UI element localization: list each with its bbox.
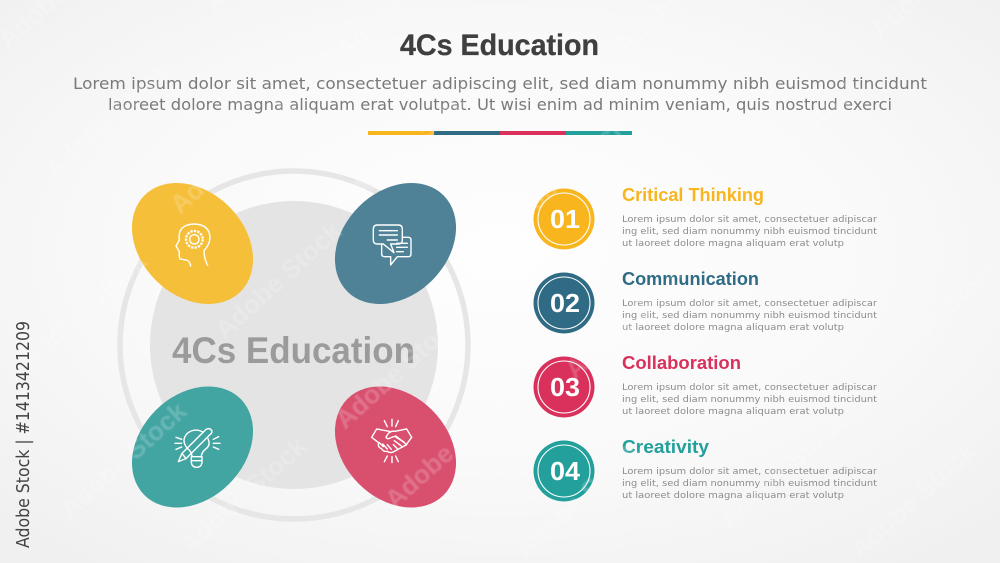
watermark pattern: Adobe Stock bbox=[714, 405, 853, 534]
badge 04 bbox=[534, 440, 594, 502]
title: 4Cs Education bbox=[400, 29, 599, 62]
watermark pattern: Adobe Stock bbox=[379, 385, 518, 514]
description: Lorem ipsum dolor sit amet, consectetuer adipiscar bbox=[622, 466, 877, 477]
description: ing elit, sed diam nonummy nibh euismod tincidunt bbox=[622, 478, 877, 489]
intro text bbox=[73, 74, 927, 114]
description: Lorem ipsum dolor sit amet, consectetuer adipiscar bbox=[622, 298, 877, 309]
icon: speech bubbles bbox=[373, 225, 411, 265]
outer ring bbox=[120, 171, 468, 519]
heading: Creativity bbox=[622, 436, 710, 457]
description: Lorem ipsum dolor sit amet, consectetuer adipiscar bbox=[622, 382, 877, 393]
petal: communication bbox=[311, 159, 480, 328]
panel: item 01 critical thinking bbox=[534, 184, 877, 250]
centre label: 4Cs Education bbox=[172, 330, 415, 371]
heading: Collaboration bbox=[622, 352, 741, 373]
watermark pattern: Adobe Stock bbox=[209, 215, 348, 344]
petal: creativity bbox=[108, 362, 277, 532]
badge 02 bbox=[534, 272, 594, 334]
watermark pattern: Adobe Stock bbox=[729, 70, 868, 199]
icon: handshake bbox=[372, 419, 412, 463]
stock id label: Adobe Stock | #1413421209 bbox=[14, 321, 34, 548]
watermark pattern: Adobe Stock bbox=[559, 255, 698, 384]
badge 04: 04 bbox=[550, 456, 581, 486]
watermark pattern: Adobe Stock bbox=[54, 395, 193, 524]
icon: bulb and pencil bbox=[175, 429, 220, 467]
description: ut laoreet dolore magna aliquam erat volutp bbox=[622, 322, 844, 333]
watermark pattern: Adobe Stock bbox=[164, 90, 303, 219]
panel: item 02 communication bbox=[534, 268, 877, 334]
heading: Critical Thinking bbox=[622, 184, 764, 205]
description bbox=[622, 382, 877, 417]
heading: Communication bbox=[622, 268, 759, 289]
description bbox=[622, 466, 877, 501]
watermark pattern: Adobe Stock bbox=[329, 305, 468, 434]
watermark pattern: Adobe Stock bbox=[844, 435, 983, 563]
description bbox=[622, 298, 877, 333]
intro text: laoreet dolore magna aliquam erat volutpat. Ut wisi enim ad minim veniam, quis nostrud exerci bbox=[108, 95, 892, 114]
description: ing elit, sed diam nonummy nibh euismod tincidunt bbox=[622, 226, 877, 237]
badge 03: 03 bbox=[550, 372, 580, 402]
description: ut laoreet dolore magna aliquam erat volutp bbox=[622, 406, 844, 417]
description: ing elit, sed diam nonummy nibh euismod tincidunt bbox=[622, 310, 877, 321]
intro text: Lorem ipsum dolor sit amet, consectetuer adipiscing elit, sed diam nonummy nibh euismod tincidunt bbox=[73, 74, 927, 93]
watermark pattern: Adobe Stock bbox=[174, 430, 313, 559]
colour divider bbox=[368, 131, 632, 135]
petal: collaboration bbox=[311, 362, 480, 532]
watermark pattern: Adobe Stock bbox=[39, 55, 178, 184]
watermark pattern: Adobe Stock bbox=[344, 75, 483, 204]
description bbox=[622, 214, 877, 249]
description: ut laoreet dolore magna aliquam erat volutp bbox=[622, 490, 844, 501]
icon: head with gear bbox=[176, 224, 210, 266]
description: Lorem ipsum dolor sit amet, consectetuer adipiscar bbox=[622, 214, 877, 225]
description: ut laoreet dolore magna aliquam erat volutp bbox=[622, 238, 844, 249]
badge 03 bbox=[534, 356, 594, 418]
centre disc bbox=[150, 201, 438, 489]
panel: item 04 creativity bbox=[534, 436, 877, 502]
watermark pattern: Adobe Stock bbox=[494, 110, 633, 239]
description: ing elit, sed diam nonummy nibh euismod tincidunt bbox=[622, 394, 877, 405]
badge 02: 02 bbox=[550, 288, 580, 318]
watermark pattern: Adobe Stock bbox=[509, 435, 648, 563]
panel: item 03 collaboration bbox=[534, 352, 877, 418]
watermark pattern: Adobe Stock bbox=[14, 245, 153, 374]
panel: circular 4Cs diagram bbox=[108, 159, 480, 532]
badge 01 bbox=[534, 188, 594, 250]
petal: critical thinking bbox=[108, 159, 277, 328]
badge 01: 01 bbox=[550, 204, 580, 234]
